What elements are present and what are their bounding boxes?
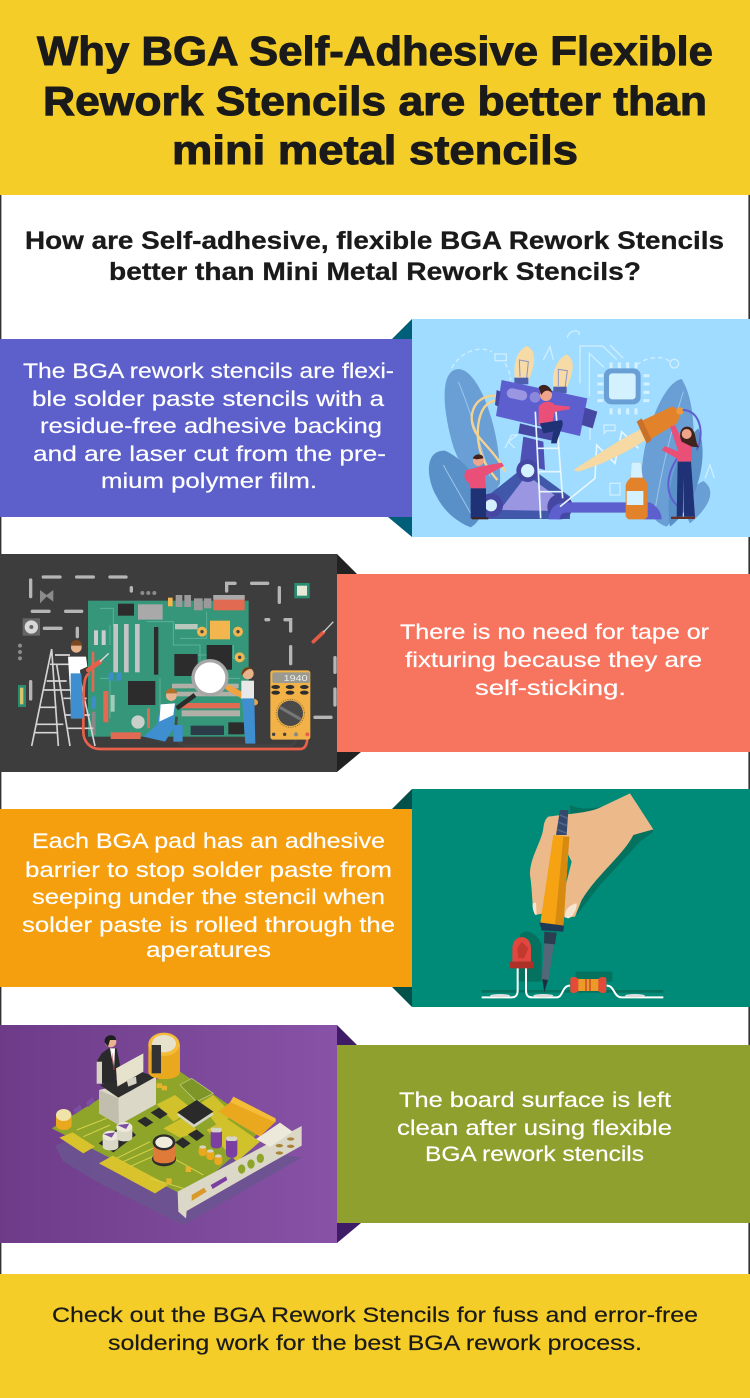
businessman (97, 1048, 120, 1083)
bottle (626, 463, 648, 519)
subheading (25, 227, 724, 286)
text band: adhesive barrier: aperatures (146, 939, 271, 962)
text band: no tape or fixturing: There is no need for tape or (400, 621, 709, 644)
illustration: technicians repairing circuit board: 1940 (284, 673, 308, 683)
woman right (662, 425, 692, 462)
chip (597, 362, 649, 414)
board (52, 1072, 263, 1198)
purple capacitors (211, 1128, 222, 1148)
central chip (177, 1102, 214, 1128)
text band: flexible polymer stencils: The BGA rework stencils are flexi- (23, 360, 394, 383)
text band: adhesive barrier: seeping under the stencil when (32, 886, 385, 909)
panel: no tape or fixturing (0, 554, 750, 772)
woman on ladder (539, 402, 570, 425)
illustration: engineers with machine and dropper (412, 319, 750, 537)
circuit board (88, 601, 249, 737)
text band: flexible polymer stencils (0, 339, 412, 517)
dropper (573, 428, 648, 472)
text band: adhesive barrier: barrier to stop solder paste from (25, 859, 392, 882)
subheading: How are Self-adhesive, flexible BGA Rework Stencils (25, 227, 724, 255)
standing technician (242, 668, 254, 679)
electrolytic capacitors (99, 1123, 136, 1152)
title banner: Why BGA Self-Adhesive Flexible (37, 28, 713, 74)
text band: clean board surface: clean after using flexible (397, 1117, 672, 1140)
illustration: hand holding soldering iron (412, 789, 750, 1007)
technician on ladder (68, 657, 87, 718)
soldering iron (556, 810, 568, 835)
desk (99, 1077, 156, 1125)
multimeter (270, 670, 310, 740)
leads (482, 968, 663, 997)
text band: clean board surface: The board surface is left (399, 1089, 671, 1112)
kneeling technician (143, 703, 175, 742)
text band: no tape or fixturing: self-sticking. (475, 677, 626, 700)
man left (464, 463, 504, 488)
orange slots (218, 1102, 276, 1137)
panel: flexible polymer stencils (0, 319, 750, 537)
text band: flexible polymer stencils: ble solder paste stencils with a (32, 388, 384, 411)
footer call to action: Check out the BGA Rework Stencils for fuss and error-free (52, 1303, 698, 1327)
board shadow (55, 1128, 302, 1225)
small yellow caps (199, 1146, 222, 1165)
small chips (137, 1108, 204, 1148)
title banner: Rework Stencils are better than (43, 78, 707, 124)
shadows (570, 798, 653, 915)
text band: flexible polymer stencils: residue-free adhesive backing (40, 415, 382, 438)
small cylinder (56, 1115, 72, 1130)
text band: adhesive barrier (0, 809, 412, 987)
resistor (570, 977, 606, 993)
text band: no tape or fixturing (337, 574, 750, 752)
text band: clean board surface (337, 1045, 750, 1223)
LED (512, 937, 531, 962)
large capacitor (148, 1044, 180, 1079)
hand (530, 793, 653, 918)
footer call to action (0, 1274, 750, 1398)
text band: adhesive barrier: Each BGA pad has an adhesive (32, 830, 385, 853)
magnifier (228, 688, 255, 702)
ladder (32, 649, 95, 746)
title banner (0, 0, 750, 195)
illustration: isometric circuit board with businessman (0, 1025, 337, 1243)
text band: flexible polymer stencils: mium polymer film. (101, 470, 317, 493)
text band: flexible polymer stencils: and are laser cut from the pre- (33, 443, 386, 466)
panel: clean board surface (0, 1025, 750, 1243)
footer call to action: soldering work for the best BGA rework process. (108, 1331, 642, 1355)
title banner: mini metal stencils (172, 127, 578, 173)
coil (152, 1152, 176, 1166)
text band: adhesive barrier: solder paste is rolled through the (22, 914, 395, 937)
subheading: better than Mini Metal Rework Stencils? (109, 258, 641, 286)
illustration: technicians repairing circuit board (0, 554, 337, 772)
text band: no tape or fixturing: fixturing because they are (405, 649, 702, 672)
text band: clean board surface: BGA rework stencils (425, 1143, 644, 1166)
panel: adhesive barrier (0, 789, 750, 1007)
red wire (83, 673, 307, 749)
io bracket (178, 1126, 302, 1218)
